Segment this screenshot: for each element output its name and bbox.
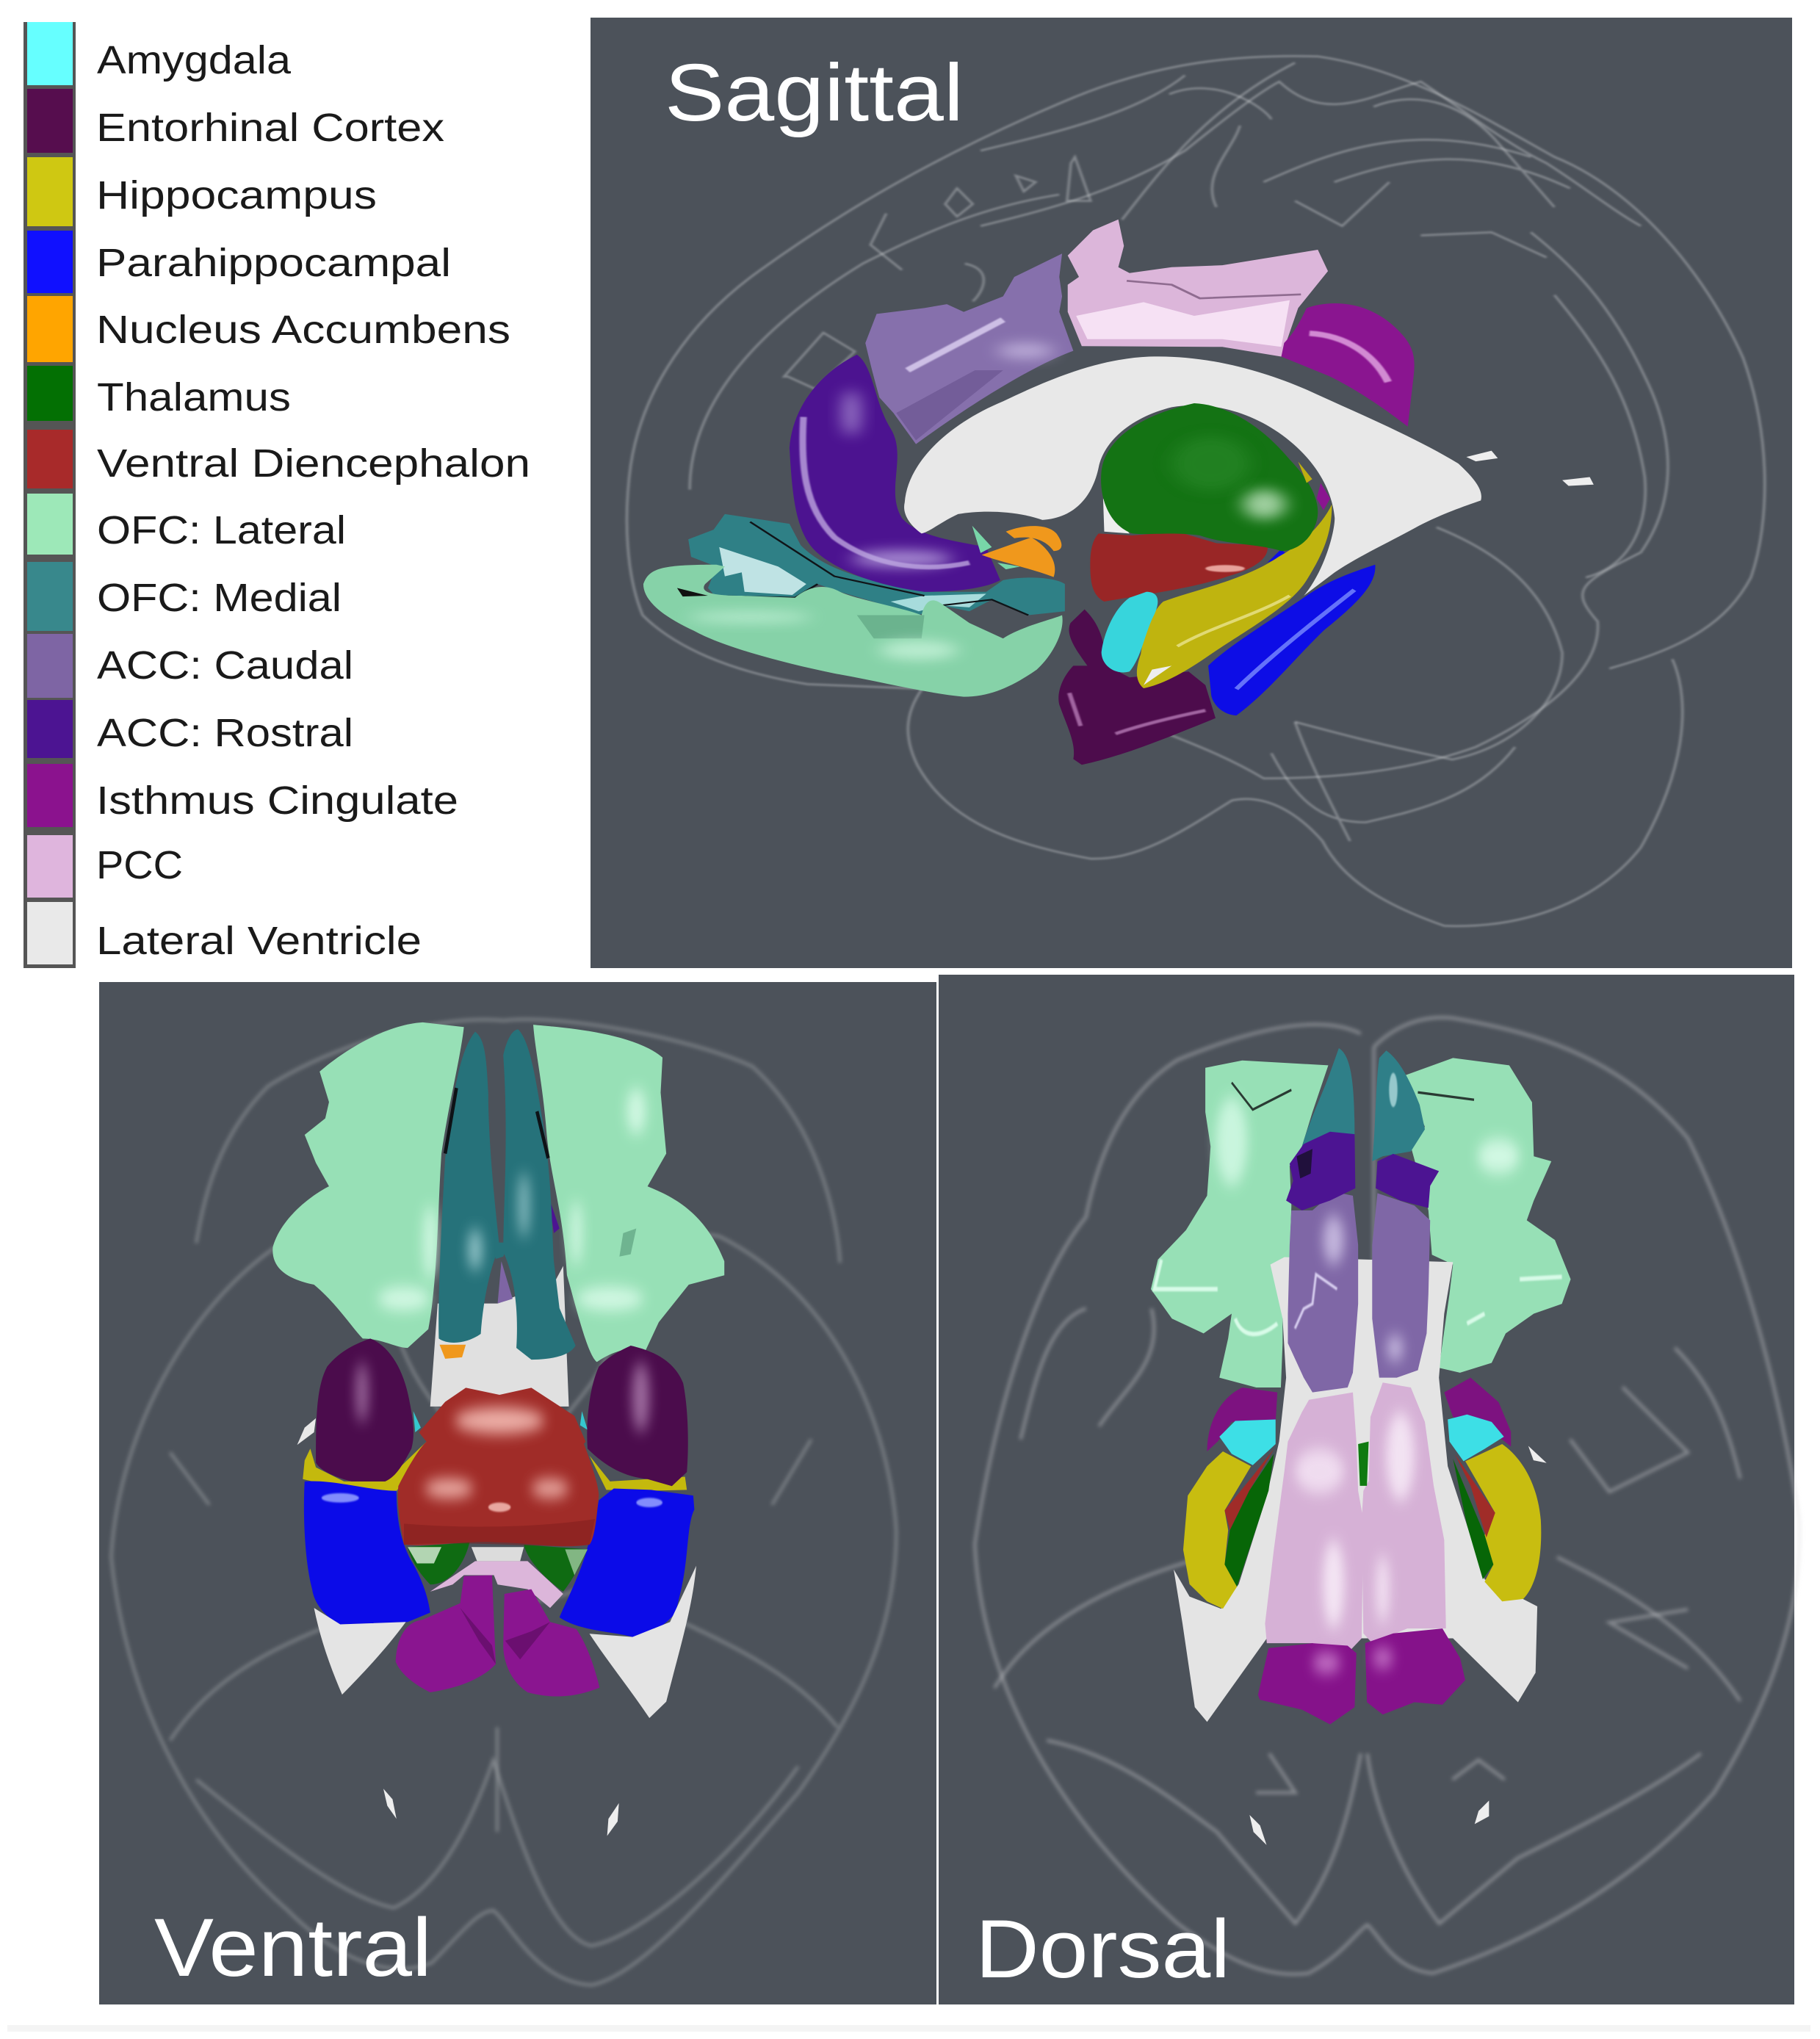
inner white sliver [1103, 499, 1130, 533]
panel: dorsal [939, 975, 1799, 2004]
legend: PCC [96, 843, 183, 887]
structure: ventral diencephalon [1224, 1449, 1495, 1537]
structure: isthmus cingulate [1282, 303, 1415, 427]
structure: ACC caudal [865, 253, 1073, 444]
structure: hippocampus [1183, 1444, 1541, 1609]
structure: thalamus [408, 1542, 588, 1592]
legend: Entorhinal Cortex [96, 106, 444, 150]
legend: Nucleus Accumbens [96, 308, 510, 352]
legend: Thalamus [97, 375, 291, 419]
brain outline: dorsal [975, 1017, 1799, 1974]
structure: ventral diencephalon [1090, 532, 1268, 602]
brain outline: ventral [111, 1020, 896, 1985]
legend: Isthmus Cingulate [96, 779, 458, 823]
structure: OFC lateral [643, 565, 1063, 697]
structure: OFC lateral right [1406, 1058, 1571, 1373]
structure: isthmus lower [1258, 1628, 1465, 1725]
structure: OFC lateral left [272, 1022, 464, 1348]
legend [24, 22, 530, 968]
structure: entorhinal cortex [316, 1338, 688, 1486]
structure: nucleus accumbens [439, 1345, 466, 1359]
structure: OFC lateral left [1151, 1061, 1329, 1387]
panel: sagittal [591, 18, 1792, 968]
structure: lateral ventricle [904, 356, 1481, 596]
small isthmus tip [1317, 483, 1330, 510]
structure: entorhinal cortex [1058, 610, 1216, 765]
structure: lateral ventricle center [430, 1266, 568, 1407]
legend: OFC: Lateral [97, 508, 346, 552]
structure: OFC medial [438, 1029, 576, 1360]
structure: isthmus upper [1207, 1378, 1511, 1451]
structure: ACC rostral [1286, 1132, 1439, 1210]
white spots: dorsal [1249, 1446, 1547, 1845]
legend: Ventral Diencephalon [97, 441, 530, 486]
sagittal brain structures [643, 220, 1481, 765]
legend: Amygdala [97, 38, 292, 82]
legend: ACC: Caudal [97, 643, 353, 688]
structure: ACC rostral [790, 355, 1000, 592]
brain outline: sagittal [627, 56, 1765, 926]
ventral brain structures [272, 1022, 724, 1718]
structure: parahippocampal [304, 1482, 694, 1637]
structure: ventral diencephalon [398, 1387, 599, 1546]
white spots [1466, 451, 1594, 486]
structure: PCC [1265, 1382, 1446, 1653]
structure: isthmus cingulate [396, 1575, 599, 1697]
legend: Hippocampus [96, 173, 377, 217]
structure: PCC [1068, 220, 1328, 357]
title: Sagittal: Sagittal [665, 48, 964, 138]
structure: amygdala tips [414, 1411, 588, 1432]
structure: amygdala [1102, 592, 1158, 672]
structure: ACC caudal sliver [498, 1261, 513, 1304]
structure: hippocampus [303, 1442, 687, 1493]
structure: amygdala [1219, 1415, 1504, 1465]
structure: white sliver [297, 1418, 316, 1445]
structure: thalamus [1101, 403, 1318, 551]
structure: PCC [430, 1561, 563, 1608]
structure: OFC medial [1302, 1048, 1425, 1161]
structure: OFC medial [688, 514, 1065, 616]
structure: center white [472, 1547, 524, 1561]
legend: OFC: Medial [97, 576, 342, 620]
faint footer bar [7, 2025, 1810, 2032]
structure: ACC caudal [1288, 1191, 1430, 1393]
structure: parahippocampal [1208, 549, 1375, 715]
structure: ventricle back right [590, 1566, 696, 1718]
structure: ventricle back left [314, 1608, 406, 1695]
legend: ACC: Rostral [97, 711, 353, 755]
structure: hippocampus [1137, 505, 1332, 688]
dorsal brain structures [1151, 1048, 1571, 1725]
small hippocampus tip [1298, 461, 1312, 483]
structure: OFC lateral right [533, 1025, 724, 1362]
structure: ventricle [1174, 1257, 1537, 1722]
white spots: ventral [383, 1789, 619, 1836]
legend: Lateral Ventricle [96, 919, 422, 963]
structure: ACC rostral sliver [548, 1196, 560, 1233]
legend: Parahippocampal [96, 241, 451, 285]
structure: nucleus accumbens [972, 526, 1061, 577]
title: Dorsal: Dorsal [975, 1903, 1230, 1995]
structure: thalamus [1224, 1454, 1493, 1587]
panel: ventral [99, 982, 936, 2004]
title: Ventral: Ventral [154, 1902, 432, 1993]
